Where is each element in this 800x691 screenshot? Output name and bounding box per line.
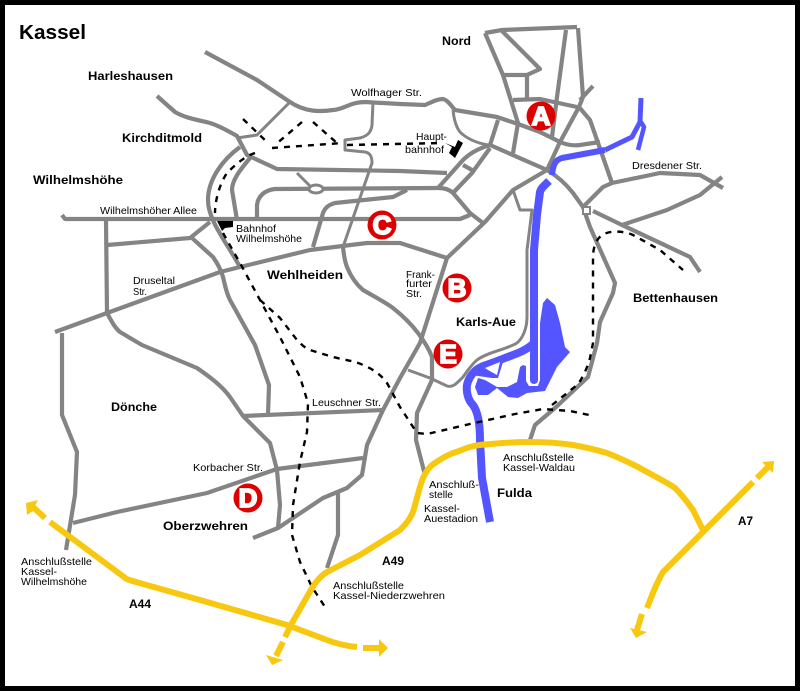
district labels: Kirchditmold <box>122 131 202 145</box>
street and place labels: Dresdener Str. <box>632 160 702 172</box>
street and place labels: Str. <box>133 286 147 298</box>
street and place labels: furter <box>406 278 433 290</box>
motorway labels <box>129 514 753 611</box>
motorway labels: A44 <box>129 597 151 611</box>
street and place labels: Korbacher Str. <box>193 462 263 474</box>
motorway junction labels: Anschlußstelle <box>503 452 574 464</box>
station labels: Wilhelmshöhe <box>236 233 302 245</box>
station labels: Haupt- <box>416 131 447 143</box>
district labels: Wilhelmshöhe <box>33 173 123 187</box>
title: Kassel <box>19 21 86 44</box>
district labels: Karls-Aue <box>456 315 516 329</box>
motorways A44 A49 A7 <box>26 442 774 665</box>
district labels: Nord <box>442 34 471 48</box>
motorway junction labels: Anschlußstelle <box>333 580 404 592</box>
station labels <box>236 131 447 245</box>
station labels: Bahnhof <box>236 223 276 235</box>
marker C <box>368 210 396 240</box>
street and place labels <box>100 87 702 474</box>
motorway labels: A49 <box>382 554 404 568</box>
marker B: B <box>448 273 466 303</box>
motorway junction labels: Kassel- <box>21 566 58 578</box>
motorway junction labels <box>21 452 575 602</box>
motorway junction labels: Wilhelmshöhe <box>21 576 87 588</box>
river Fulda and lake <box>467 98 644 522</box>
street and place labels: Leuschner Str. <box>312 397 381 409</box>
district labels: Oberzwehren <box>163 519 248 533</box>
district labels: Dönche <box>111 400 157 414</box>
street and place labels: Wilhelmshöher Allee <box>100 205 197 217</box>
road network <box>55 27 723 568</box>
motorway junction labels: Kassel-Waldau <box>503 462 575 474</box>
marker B <box>442 273 472 303</box>
district labels: Fulda <box>497 486 532 500</box>
motorway junction labels: stelle <box>429 489 453 501</box>
marker E: E <box>439 339 457 369</box>
district labels: Wehlheiden <box>267 268 343 282</box>
motorway junction labels: Auestadion <box>424 513 478 525</box>
marker D: D <box>239 483 257 513</box>
street and place labels: Str. <box>406 288 422 300</box>
district labels <box>33 34 718 533</box>
motorway junction labels: Anschluß- <box>429 479 480 491</box>
street and place labels: Frank- <box>406 269 435 281</box>
railway lines <box>215 119 683 610</box>
district labels: Bettenhausen <box>633 291 718 305</box>
motorway junction labels: Kassel-Niederzwehren <box>333 590 445 602</box>
marker A <box>526 101 556 131</box>
district labels: Harleshausen <box>88 69 173 83</box>
station labels: bahnhof <box>405 144 444 156</box>
street and place labels: Druseltal <box>133 275 175 287</box>
marker D <box>234 483 262 513</box>
marker A: A <box>532 101 551 131</box>
marker E <box>434 339 462 369</box>
motorway junction labels: Anschlußstelle <box>21 556 92 568</box>
motorway labels: A7 <box>738 514 753 528</box>
railway station marker: Wilhelmshöhe <box>217 221 233 231</box>
street and place labels: Wolfhager Str. <box>351 87 422 99</box>
marker C: C <box>373 210 392 240</box>
road junction square <box>583 207 590 214</box>
motorway junction labels: Kassel- <box>424 503 461 515</box>
icon: Hauptbahnhof station <box>445 140 463 158</box>
